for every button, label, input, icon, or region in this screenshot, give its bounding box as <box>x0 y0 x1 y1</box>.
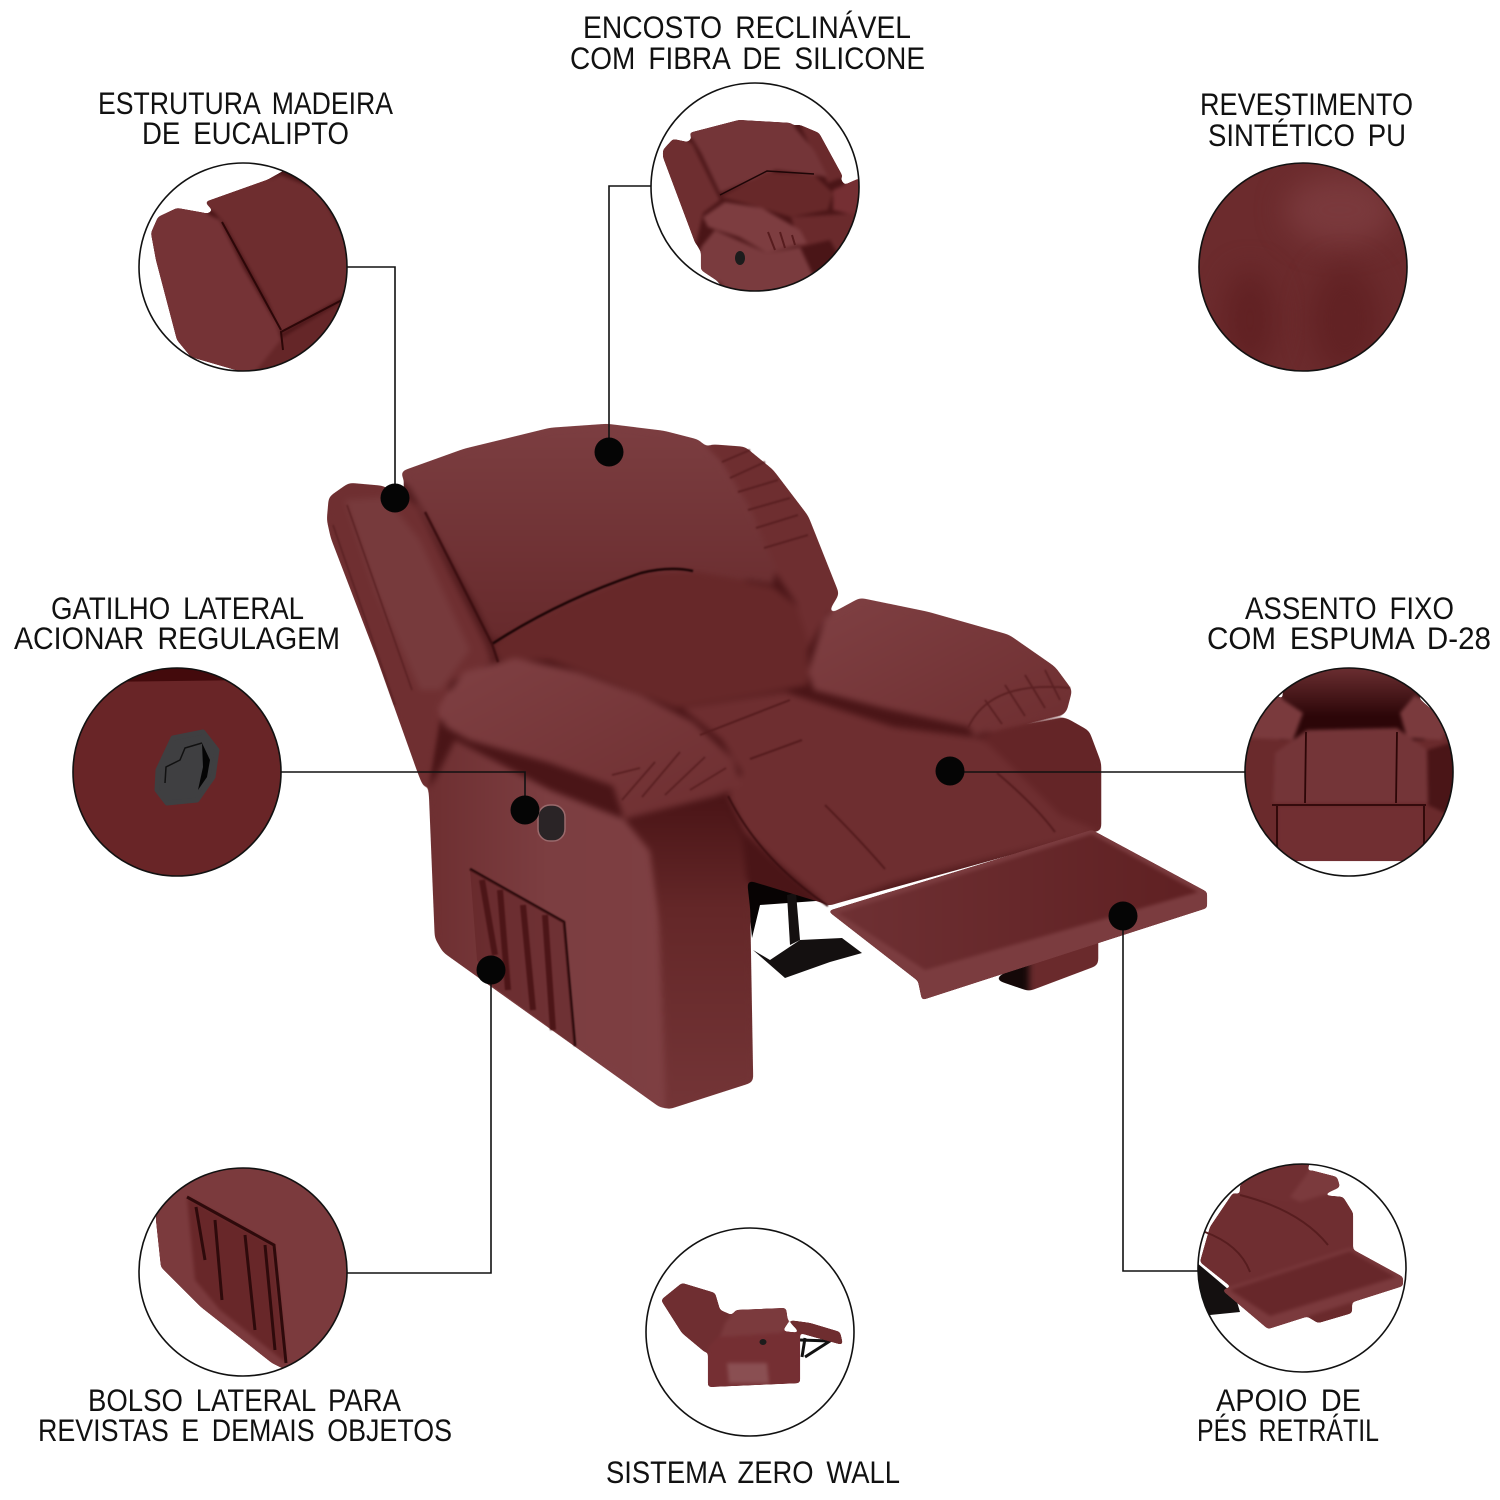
footrest block <box>1029 930 1098 991</box>
label: gatilho: ACIONAR REGULAGEM <box>14 620 340 656</box>
apoio outline <box>1198 1164 1406 1372</box>
apoio back <box>1236 1164 1311 1202</box>
mechanism under the chair <box>742 830 862 978</box>
left arm pleats <box>612 752 726 800</box>
dark underlay joining the parts <box>430 570 1100 905</box>
inset circle: estrutura <box>139 163 350 380</box>
label: revestimento: REVESTIMENTO <box>1200 86 1413 122</box>
footrest <box>828 830 1207 1000</box>
label: apoio: PÉS RETRÁTIL <box>1197 1412 1379 1448</box>
chair detail lines <box>333 450 1070 1046</box>
assento seams <box>1272 732 1426 847</box>
label: gatilho: GATILHO LATERAL <box>51 590 304 626</box>
base front panel <box>624 800 753 1110</box>
label: revestimento: SINTÉTICO PU <box>1208 117 1406 153</box>
estrutura back <box>205 175 350 333</box>
bolso pleats <box>187 1197 286 1363</box>
label: apoio <box>1197 1382 1379 1448</box>
inset circle: encosto <box>651 83 862 292</box>
label: encosto <box>570 9 925 76</box>
seat cushion <box>682 692 1101 906</box>
encosto details <box>720 171 814 265</box>
label: encosto: ENCOSTO RECLINÁVEL <box>583 9 911 45</box>
inset circle: gatilho <box>73 664 281 876</box>
label: assento <box>1207 590 1491 656</box>
right arm base <box>980 718 1101 832</box>
inset circle: apoio de pes <box>1196 1160 1406 1372</box>
upholstered body <box>327 424 1101 1110</box>
inset circle: assento <box>1240 660 1460 876</box>
back cushion <box>400 424 776 640</box>
side pocket fill <box>470 869 575 1046</box>
label: zero wall: SISTEMA ZERO WALL <box>606 1454 900 1490</box>
assento outline <box>1245 668 1453 876</box>
encosto chair <box>663 120 862 292</box>
estrutura fill <box>204 172 342 338</box>
label: estrutura <box>98 85 393 151</box>
seat seams <box>700 700 1055 869</box>
assento arms <box>1250 693 1303 740</box>
assento back <box>1280 660 1425 740</box>
right wing pleats <box>722 450 808 548</box>
gatilho handle <box>157 732 217 803</box>
lumbar cushion <box>492 571 808 708</box>
estrutura lower <box>259 302 340 368</box>
gatilho dark band <box>127 668 224 682</box>
label: estrutura: ESTRUTURA MADEIRA <box>98 85 393 121</box>
base side panel <box>429 740 668 1110</box>
apoio arm <box>1290 1170 1340 1202</box>
apoio seams <box>1205 1195 1328 1272</box>
connector: estrutura <box>347 267 410 512</box>
estrutura seam <box>222 222 342 350</box>
label: gatilho <box>14 590 340 656</box>
bolso pocket <box>187 1197 286 1363</box>
apoio mechanism <box>1196 1262 1240 1315</box>
side trigger <box>538 805 565 841</box>
inset circle: revestimento <box>1199 163 1407 375</box>
zero wall chair <box>661 1283 843 1387</box>
connector: apoio <box>1108 902 1198 1271</box>
apoio footrest <box>1222 1248 1403 1329</box>
left wing stitch <box>333 505 412 705</box>
side pocket <box>470 869 575 1046</box>
label: bolso <box>38 1382 452 1448</box>
assento cushion <box>1273 728 1428 803</box>
main illustration: reclining armchair <box>327 424 1207 1110</box>
assento body <box>1246 732 1448 847</box>
revestimento folds <box>1234 178 1388 358</box>
connector: gatilho <box>281 772 540 824</box>
estrutura wing <box>151 208 283 375</box>
connector: encosto <box>594 186 651 466</box>
estrutura outline <box>139 163 347 371</box>
bolso panel <box>156 1168 346 1368</box>
seam between back and lumbar <box>492 569 693 644</box>
chair left wing <box>327 483 492 793</box>
apoio block <box>1304 1301 1356 1322</box>
label: assento: ASSENTO FIXO <box>1245 590 1454 626</box>
inset circle: zero wall <box>646 1228 854 1436</box>
right arm pleats <box>968 670 1070 728</box>
right arm <box>808 598 1072 736</box>
left arm <box>438 658 742 819</box>
apoio seat <box>1200 1193 1353 1286</box>
label: bolso: REVISTAS E DEMAIS OBJETOS <box>38 1412 452 1448</box>
bolso outline <box>139 1168 347 1376</box>
label: estrutura: DE EUCALIPTO <box>142 115 349 151</box>
label: bolso: BOLSO LATERAL PARA <box>88 1382 401 1418</box>
connector: bolso <box>347 956 506 1273</box>
label: revestimento <box>1200 86 1413 153</box>
seat left shadow <box>728 796 828 906</box>
zero wall mechanism <box>800 1338 830 1357</box>
connector: assento <box>936 756 1245 786</box>
encosto outline <box>651 83 859 291</box>
back-to-wing seam <box>425 512 498 662</box>
gatilho outline <box>73 668 281 876</box>
label: apoio: APOIO DE <box>1216 1382 1361 1418</box>
assento lower <box>1295 860 1403 862</box>
revestimento outline <box>1199 163 1407 371</box>
label: encosto: COM FIBRA DE SILICONE <box>570 40 925 76</box>
inset circle: bolso <box>139 1160 360 1376</box>
